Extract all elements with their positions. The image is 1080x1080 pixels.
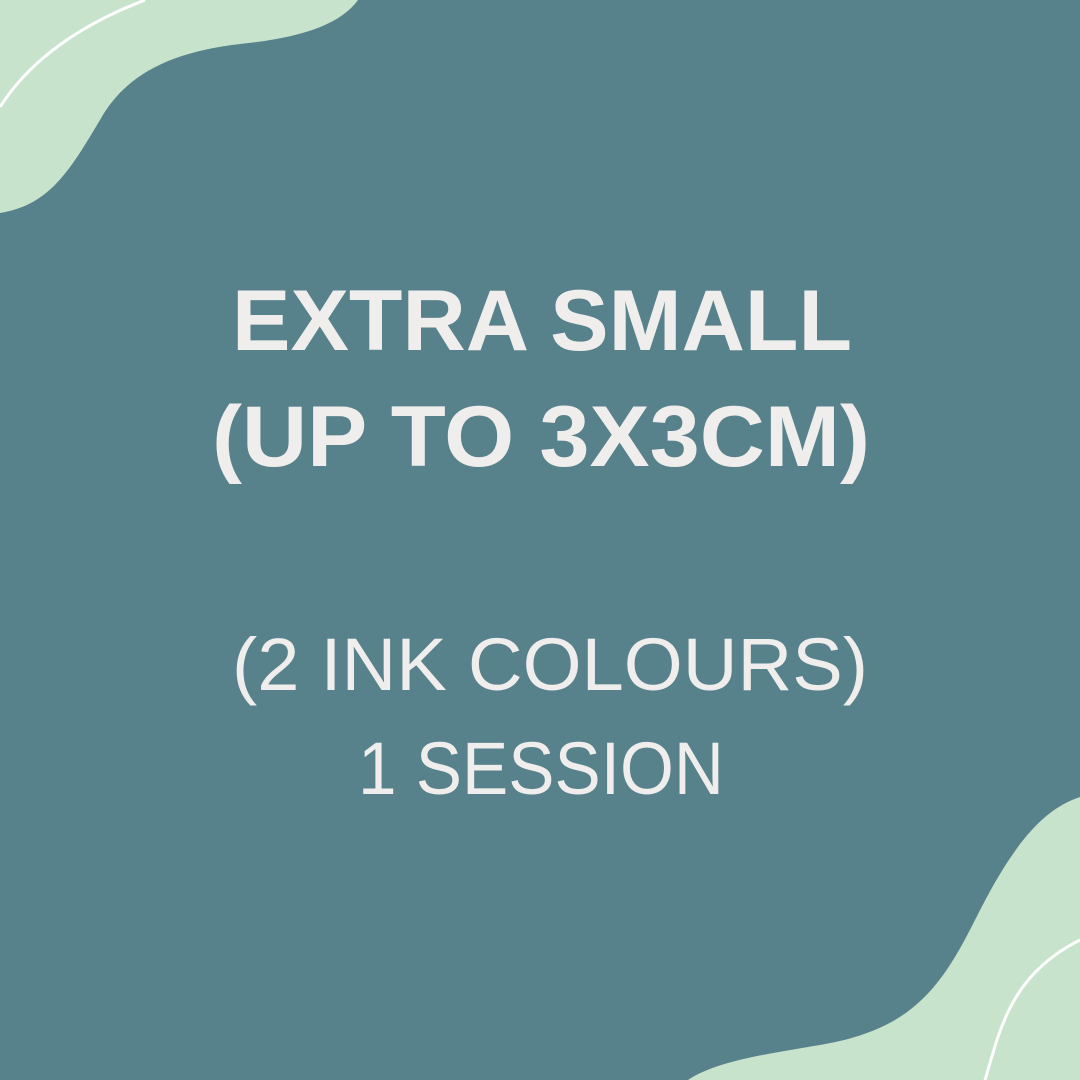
title bbox=[212, 273, 870, 485]
subtitle text block: 1 SESSION bbox=[358, 727, 724, 810]
decoration: top-left blob bbox=[0, 0, 358, 213]
subtitle text block: (2 INK COLOURS) bbox=[232, 623, 868, 706]
decoration: bottom-right blob bbox=[688, 797, 1080, 1080]
subtitle text block bbox=[232, 623, 868, 810]
title: EXTRA SMALL bbox=[232, 273, 852, 369]
title: (UP TO 3X3CM) bbox=[212, 389, 870, 485]
